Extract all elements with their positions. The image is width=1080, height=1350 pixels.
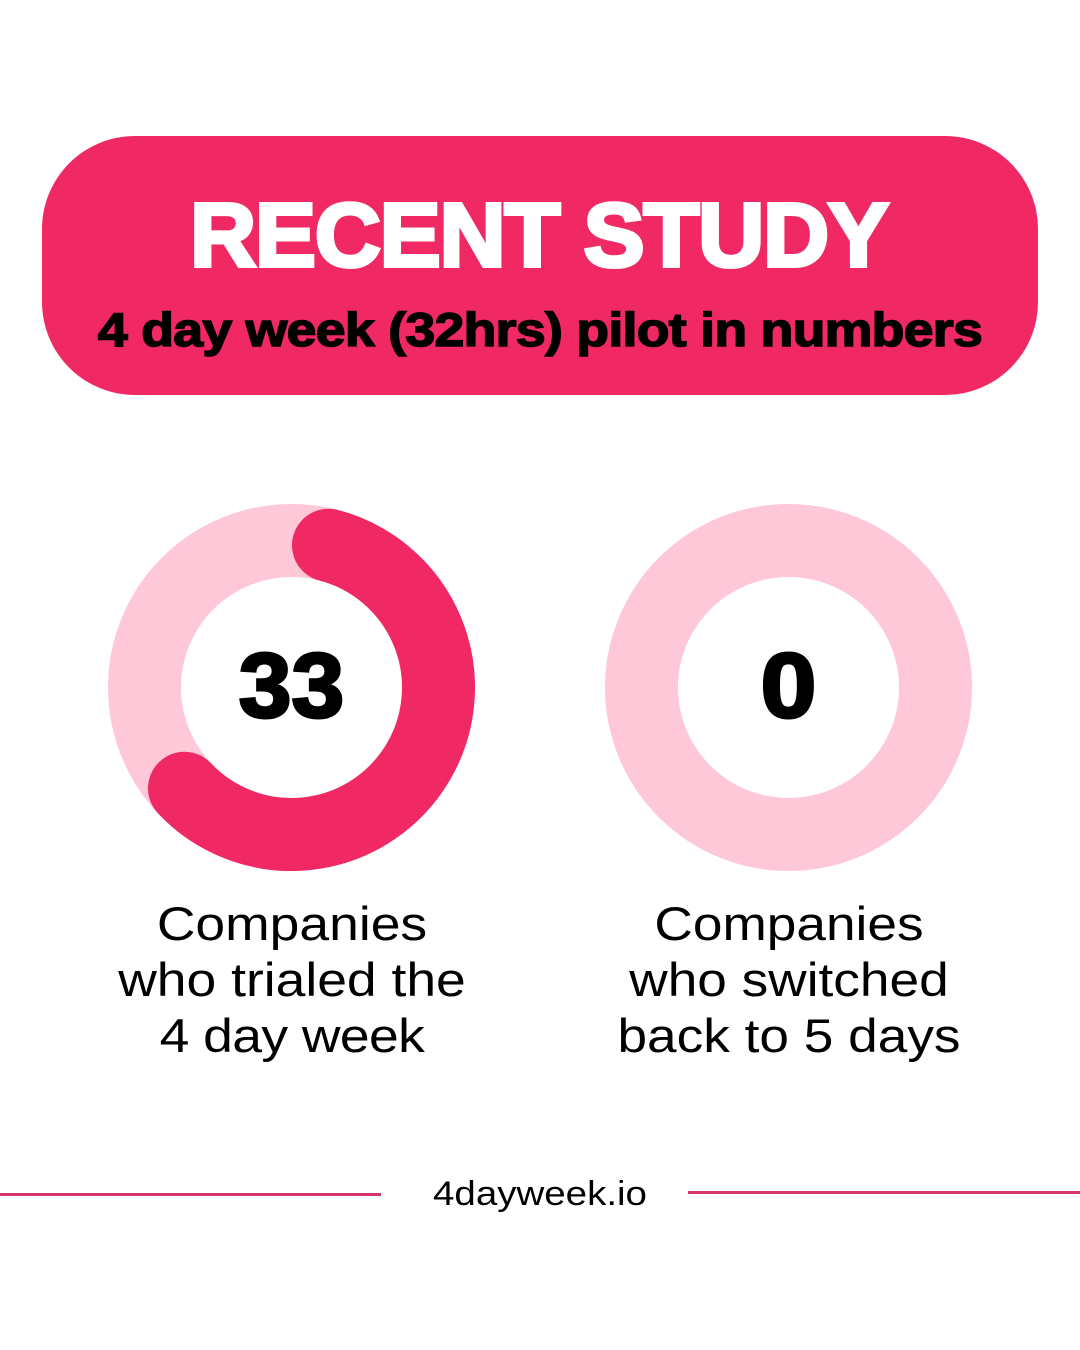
number: 0: 0: [761, 635, 816, 737]
caption: companies who trialed: Companies: [157, 897, 427, 950]
caption: companies who switched back: back to 5 days: [617, 1009, 961, 1062]
number: 33: 33: [239, 635, 344, 737]
donut chart: 0 companies: [605, 504, 972, 871]
caption: companies who switched back: Companies: [654, 897, 924, 950]
caption: companies who trialed: [118, 897, 466, 1062]
caption: companies who trialed: 4 day week: [160, 1009, 424, 1062]
subtitle: 4 day week (32hrs) pilot in numbers: [98, 303, 982, 356]
caption: companies who trialed: who trialed the: [118, 953, 466, 1006]
footer left rule: [0, 1193, 381, 1196]
title: RECENT STUDY: [190, 186, 888, 286]
footer right rule: [688, 1191, 1080, 1194]
caption: companies who switched back: who switched: [629, 953, 949, 1006]
donut chart: 33 companies: [108, 504, 475, 871]
header banner: [42, 136, 1038, 395]
footer website: 4dayweek.io: [433, 1175, 647, 1213]
caption: companies who switched back: [617, 897, 961, 1062]
